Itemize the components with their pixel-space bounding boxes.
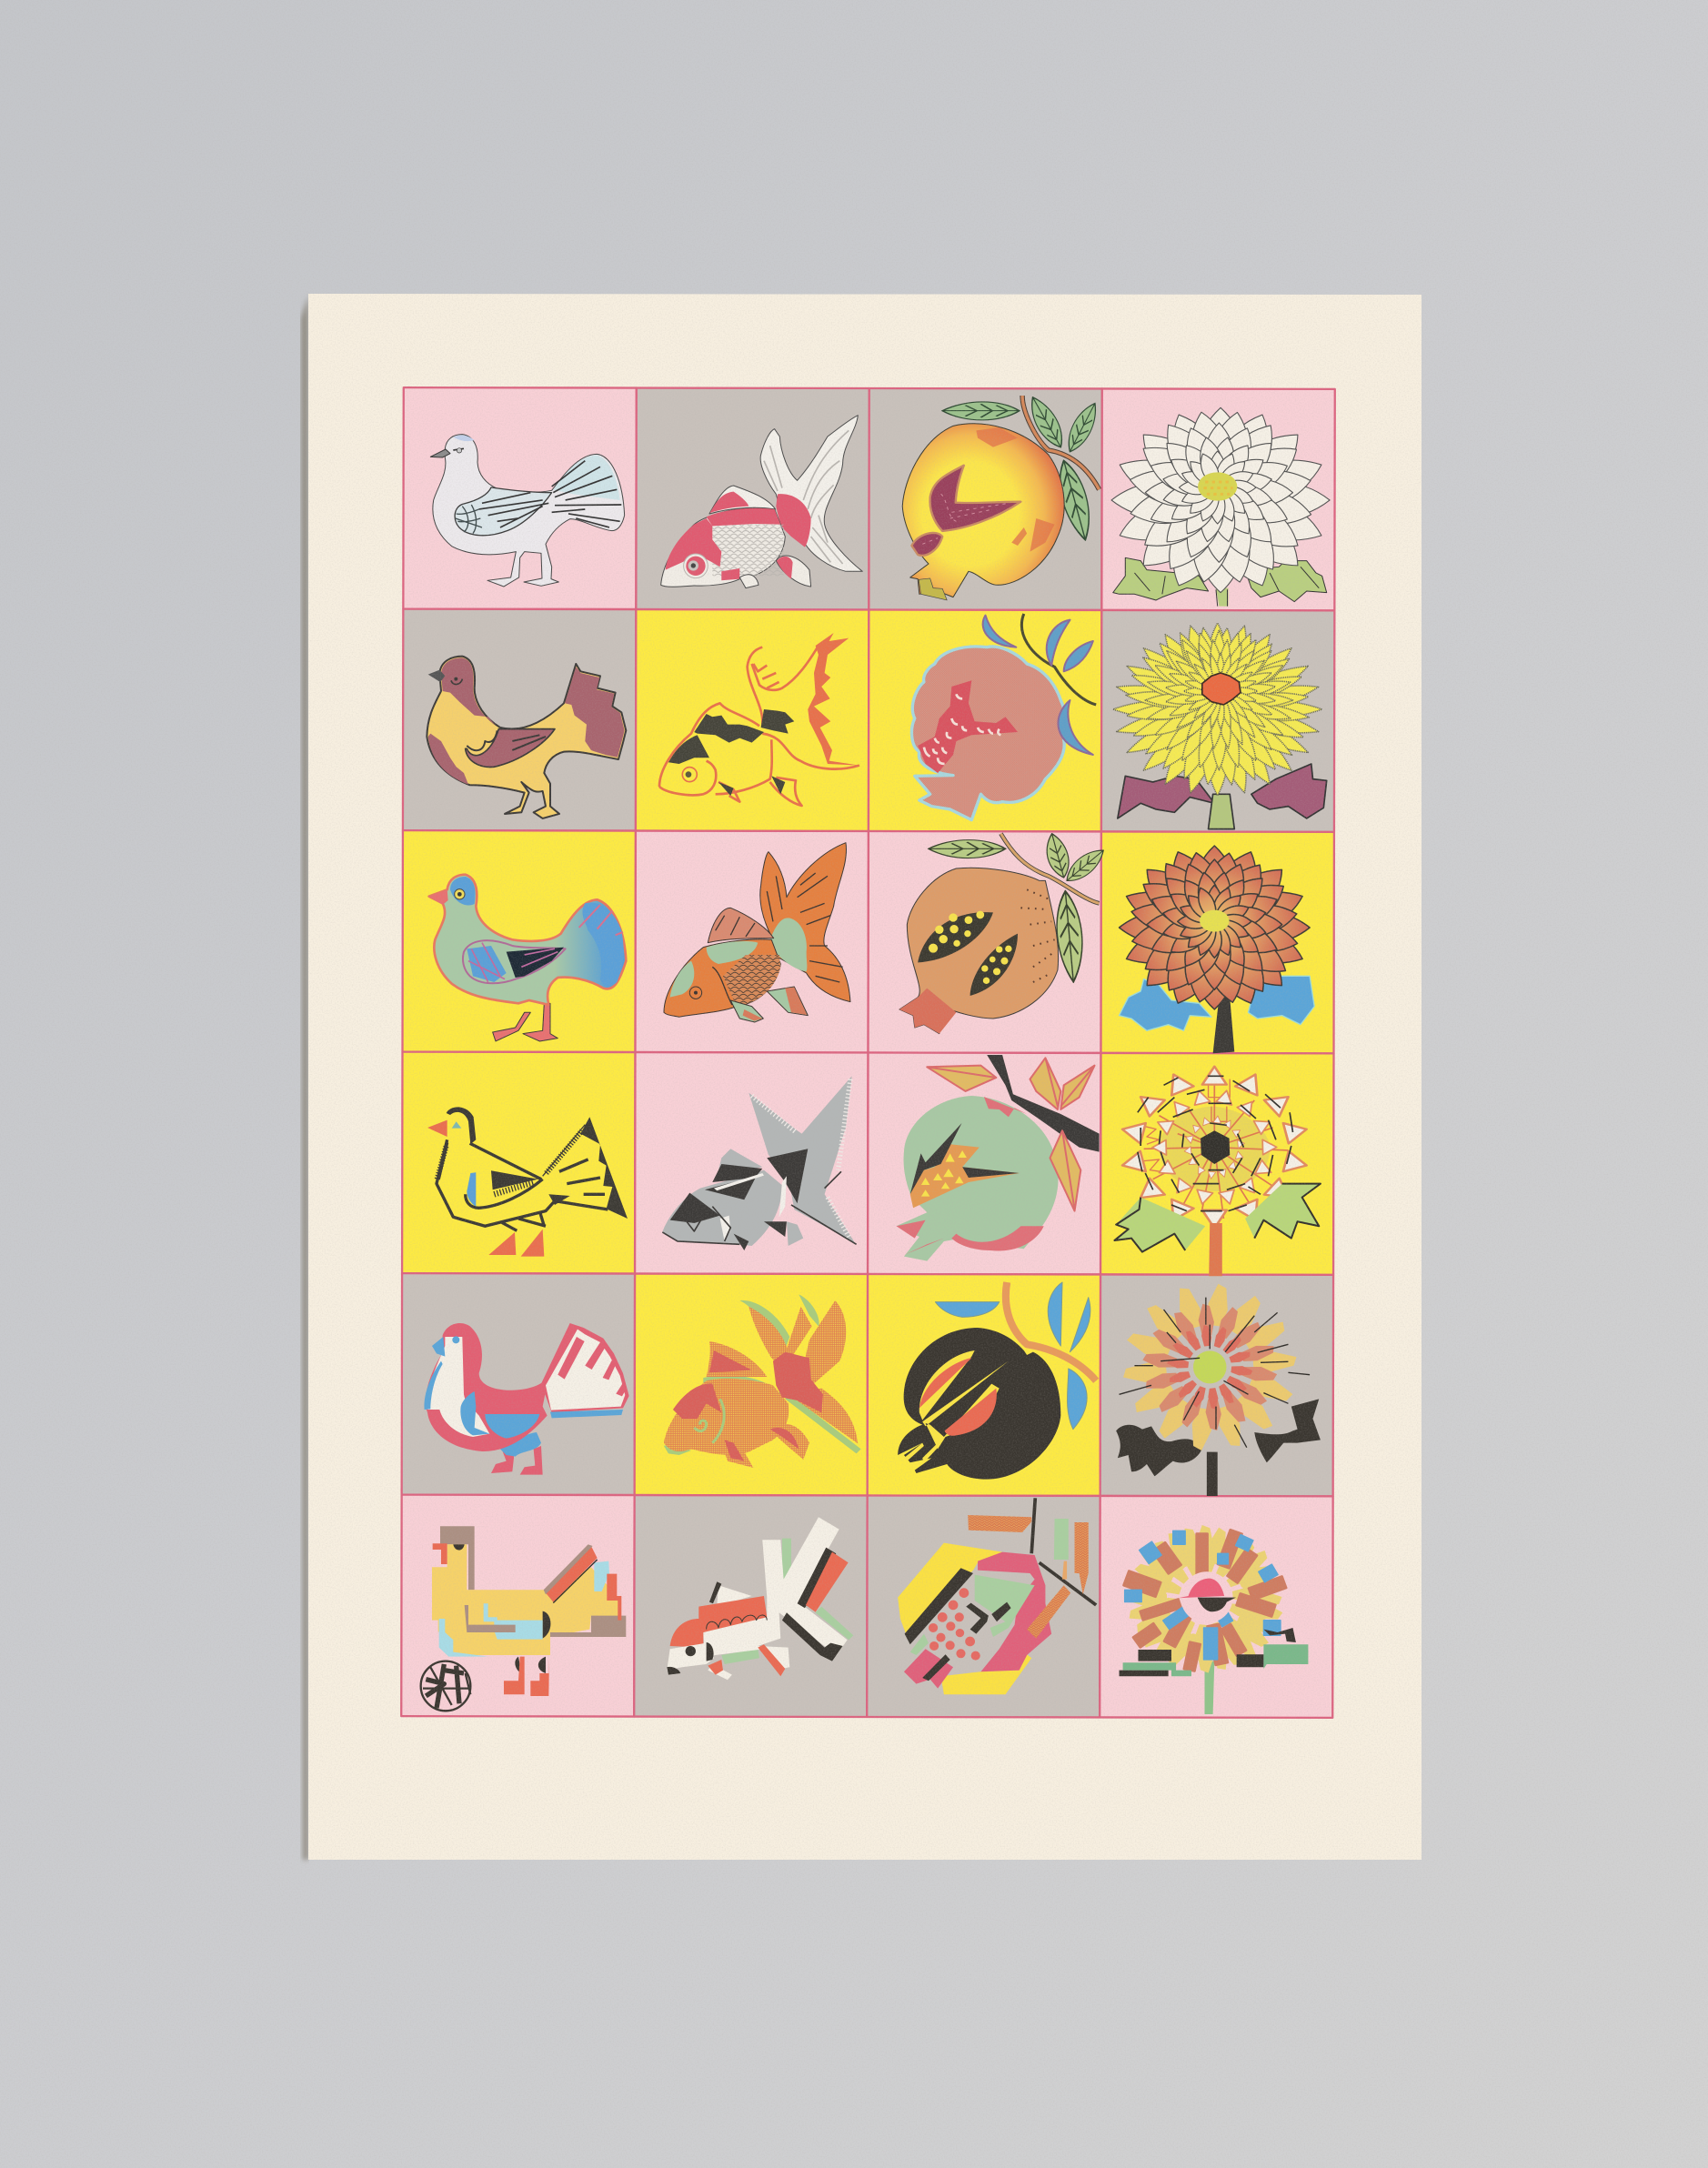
icon: white chrysanthemum xyxy=(1111,395,1330,607)
cream paper sheet xyxy=(308,294,1422,1860)
icon: geometric grey goldfish xyxy=(662,1076,857,1250)
icon: green and blue pigeon on yellow xyxy=(429,875,626,1041)
icon: black pomegranate with red slit xyxy=(898,1282,1096,1480)
icon: blocky white and red goldfish xyxy=(667,1517,853,1680)
grid of 24 coloured cells xyxy=(401,387,1335,1718)
icon: pomegranate with yellow and orange shading xyxy=(902,393,1103,600)
icon: artist monogram seal xyxy=(421,1661,470,1711)
icon: orange and green goldfish xyxy=(664,843,850,1022)
icon: geometric dandelion flower on yellow xyxy=(1114,1067,1321,1276)
paper shadow xyxy=(301,296,308,1860)
icon: abstract chrysanthemum on grey xyxy=(1111,1272,1321,1496)
icon: red and white goldfish xyxy=(661,416,862,588)
icon: white dove xyxy=(430,435,625,587)
icon: terracotta chrysanthemum with blue leaves xyxy=(1117,838,1314,1053)
icon: yellow chrysanthemum with purple leaves xyxy=(1113,617,1327,829)
icon: dark red and yellow bird xyxy=(427,657,626,818)
icon: outlined goldfish on yellow xyxy=(659,633,859,806)
icon: geometric black yellow bird xyxy=(427,1107,628,1257)
icon: green pomegranate with black branch xyxy=(896,1055,1100,1261)
icon: blocky yellow bird with monogram xyxy=(421,1526,626,1711)
icon: abstract block pomegranate xyxy=(898,1498,1096,1694)
icon: stippled orange goldfish on yellow xyxy=(664,1294,861,1468)
icon: red white and blue bird xyxy=(424,1323,629,1475)
icon: orange pomegranate with seed slits xyxy=(899,831,1109,1034)
icon: radial block flower with half domes xyxy=(1113,1511,1308,1714)
icon: terracotta pomegranate on yellow xyxy=(911,614,1096,820)
